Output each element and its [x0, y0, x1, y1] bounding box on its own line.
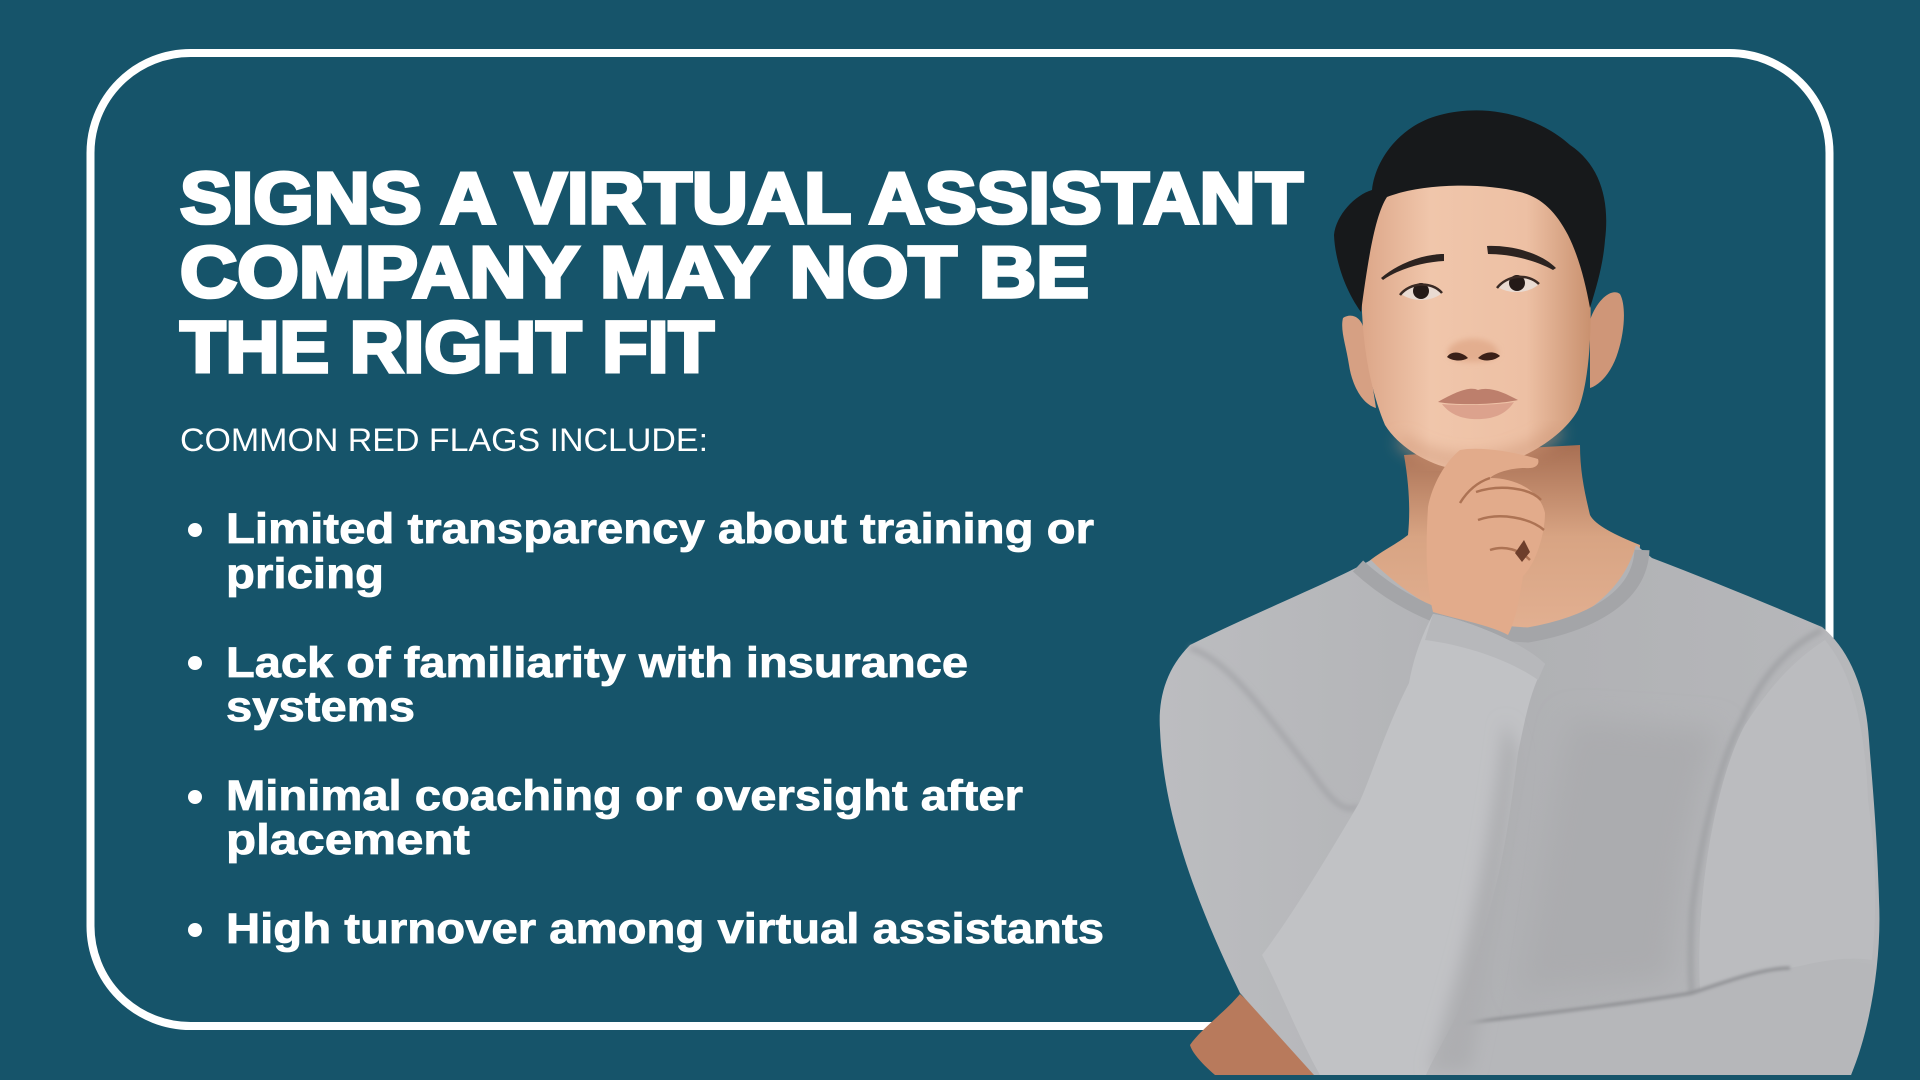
right eye — [1497, 275, 1539, 292]
hand finger shadows — [1460, 478, 1544, 560]
bullet 2: Lack of familiarity with insurance — [226, 639, 968, 687]
raised sleeve — [1262, 614, 1545, 1075]
right eyebrow — [1487, 246, 1556, 270]
sleeve shading — [1430, 720, 1518, 1070]
bullet list — [188, 505, 1104, 953]
lips — [1438, 389, 1518, 419]
neck — [1368, 445, 1640, 628]
torso shading — [1190, 630, 1822, 995]
bullet 4: High turnover among virtual assistants — [226, 905, 1104, 953]
title: THE RIGHT FIT — [180, 308, 714, 388]
cuff — [1425, 614, 1545, 680]
subheading: COMMON RED FLAGS INCLUDE: — [180, 422, 708, 458]
right ear — [1590, 292, 1624, 388]
left ear — [1342, 316, 1376, 408]
bullet 2: systems — [226, 683, 415, 731]
collar — [1358, 550, 1642, 635]
bullet 1: Limited transparency about training or — [226, 505, 1094, 553]
title: COMPANY MAY NOT BE — [180, 233, 1089, 313]
bullet 2 — [188, 639, 968, 731]
left eye — [1400, 283, 1442, 300]
nose — [1447, 339, 1500, 362]
bullet 1: pricing — [226, 550, 384, 598]
bullet 3 — [188, 772, 1023, 864]
person thinking — [1160, 110, 1879, 1075]
title — [180, 159, 1303, 388]
bullet 1 — [188, 505, 1094, 598]
bullet 3: placement — [226, 816, 470, 864]
bullet 3: Minimal coaching or oversight after — [226, 772, 1023, 820]
crossed forearm — [1851, 1070, 1853, 1075]
forearm shadow — [1458, 968, 1790, 1024]
hair — [1334, 110, 1606, 312]
right sleeve highlight — [1700, 716, 1752, 986]
left eyebrow — [1381, 254, 1444, 280]
face — [1362, 186, 1591, 467]
lower hand — [1190, 994, 1314, 1075]
title: SIGNS A VIRTUAL ASSISTANT — [180, 159, 1303, 239]
torso and left arm — [1160, 545, 1879, 1075]
gap between fingers — [1515, 540, 1530, 562]
cheek and chin shading — [1400, 430, 1560, 461]
chin hand — [1427, 449, 1545, 635]
